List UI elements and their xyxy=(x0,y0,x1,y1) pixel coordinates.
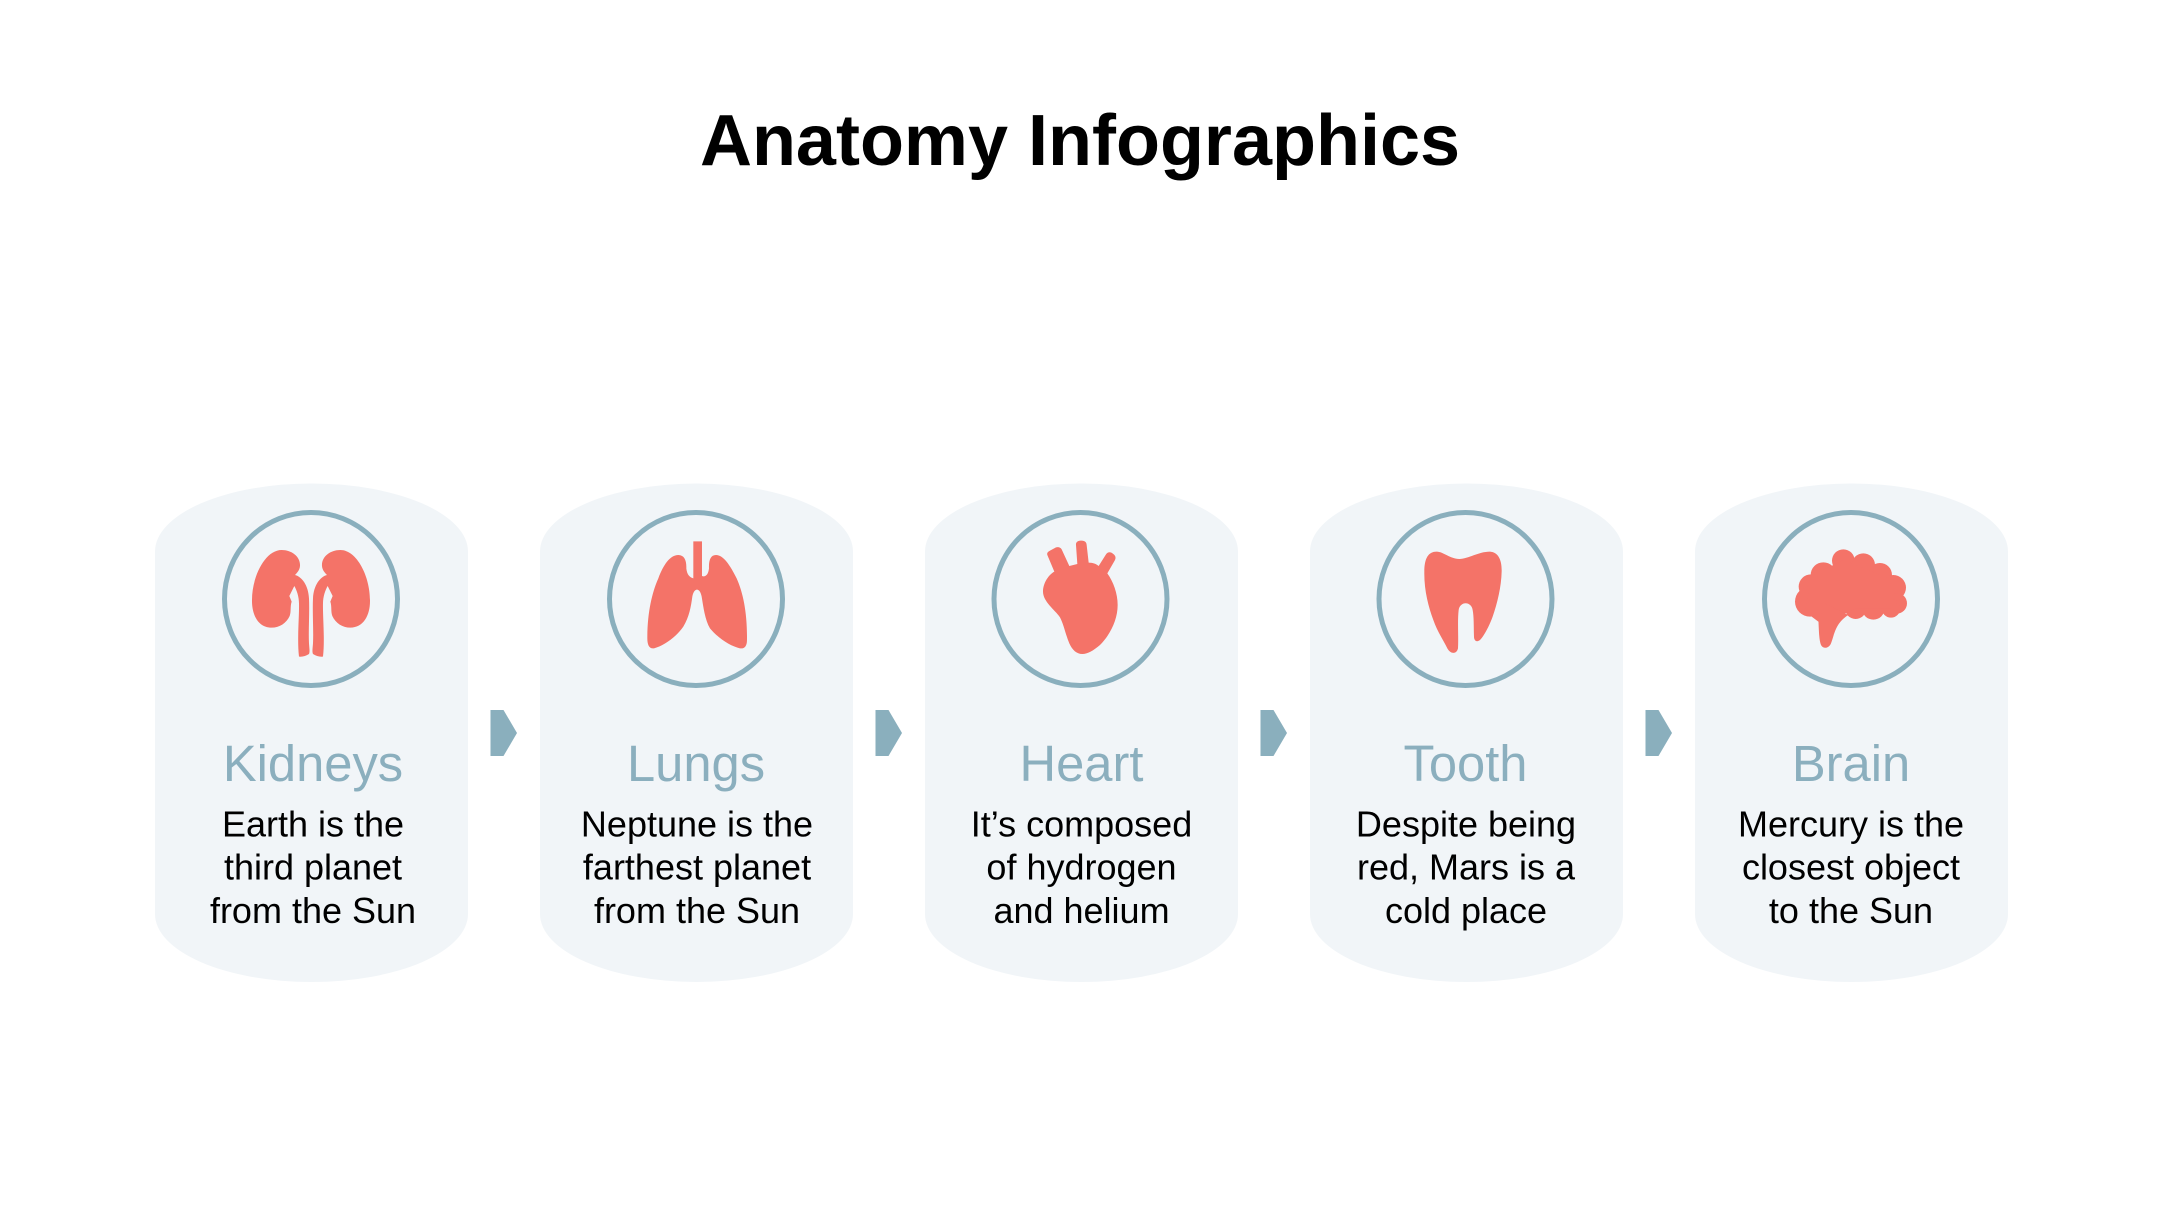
icon ring: lungs xyxy=(610,512,782,686)
description: heart: It’s composed xyxy=(971,804,1192,844)
description: tooth: red, Mars is a xyxy=(1357,847,1576,888)
heading: brain: Brain xyxy=(1792,735,1910,792)
icon ring: kidneys xyxy=(224,512,398,686)
description: kidneys: third planet xyxy=(224,847,402,888)
heading: kidneys: Kidneys xyxy=(223,735,403,792)
arrow: tooth to brain xyxy=(1646,710,1672,756)
panel: heart xyxy=(925,484,1238,982)
icon ring: heart xyxy=(994,512,1167,686)
panel: lungs xyxy=(540,484,853,982)
title: Anatomy Infographics xyxy=(700,101,1460,181)
heading: tooth: Tooth xyxy=(1404,735,1528,792)
arrow: lungs to heart xyxy=(876,710,902,756)
panel background: lungs xyxy=(540,484,853,982)
icon: kidneys xyxy=(252,550,370,657)
description: heart: of hydrogen xyxy=(986,847,1177,888)
description: brain: closest object xyxy=(1742,847,1960,888)
description: brain: to the Sun xyxy=(1769,890,1933,931)
panel background: tooth xyxy=(1310,484,1623,982)
description: kidneys: from the Sun xyxy=(210,890,416,931)
description: tooth: cold place xyxy=(1385,890,1547,931)
panel background: kidneys xyxy=(155,484,468,982)
arrow: kidneys to lungs xyxy=(490,710,517,756)
heading: lungs: Lungs xyxy=(627,735,765,792)
description: brain: Mercury is the xyxy=(1738,804,1964,844)
panel: brain xyxy=(1695,484,2008,982)
panel background: brain xyxy=(1695,484,2008,982)
description: kidneys: Earth is the xyxy=(222,804,404,844)
description: lungs: farthest planet xyxy=(583,847,811,888)
icon: lungs xyxy=(647,541,747,648)
description: heart: and helium xyxy=(993,890,1170,931)
icon ring: brain xyxy=(1764,512,1938,686)
icon: brain xyxy=(1795,549,1907,648)
icon ring: tooth xyxy=(1379,512,1552,686)
description: lungs: Neptune is the xyxy=(581,804,813,844)
icon: heart xyxy=(1043,541,1118,654)
panel: tooth xyxy=(1310,484,1623,982)
icon: tooth xyxy=(1424,552,1502,653)
description: lungs: from the Sun xyxy=(594,890,800,931)
arrow: heart to tooth xyxy=(1260,710,1287,756)
heading: heart: Heart xyxy=(1020,735,1143,792)
panel background: heart xyxy=(925,484,1238,982)
description: tooth: Despite being xyxy=(1356,804,1576,844)
panel: kidneys xyxy=(155,484,468,982)
